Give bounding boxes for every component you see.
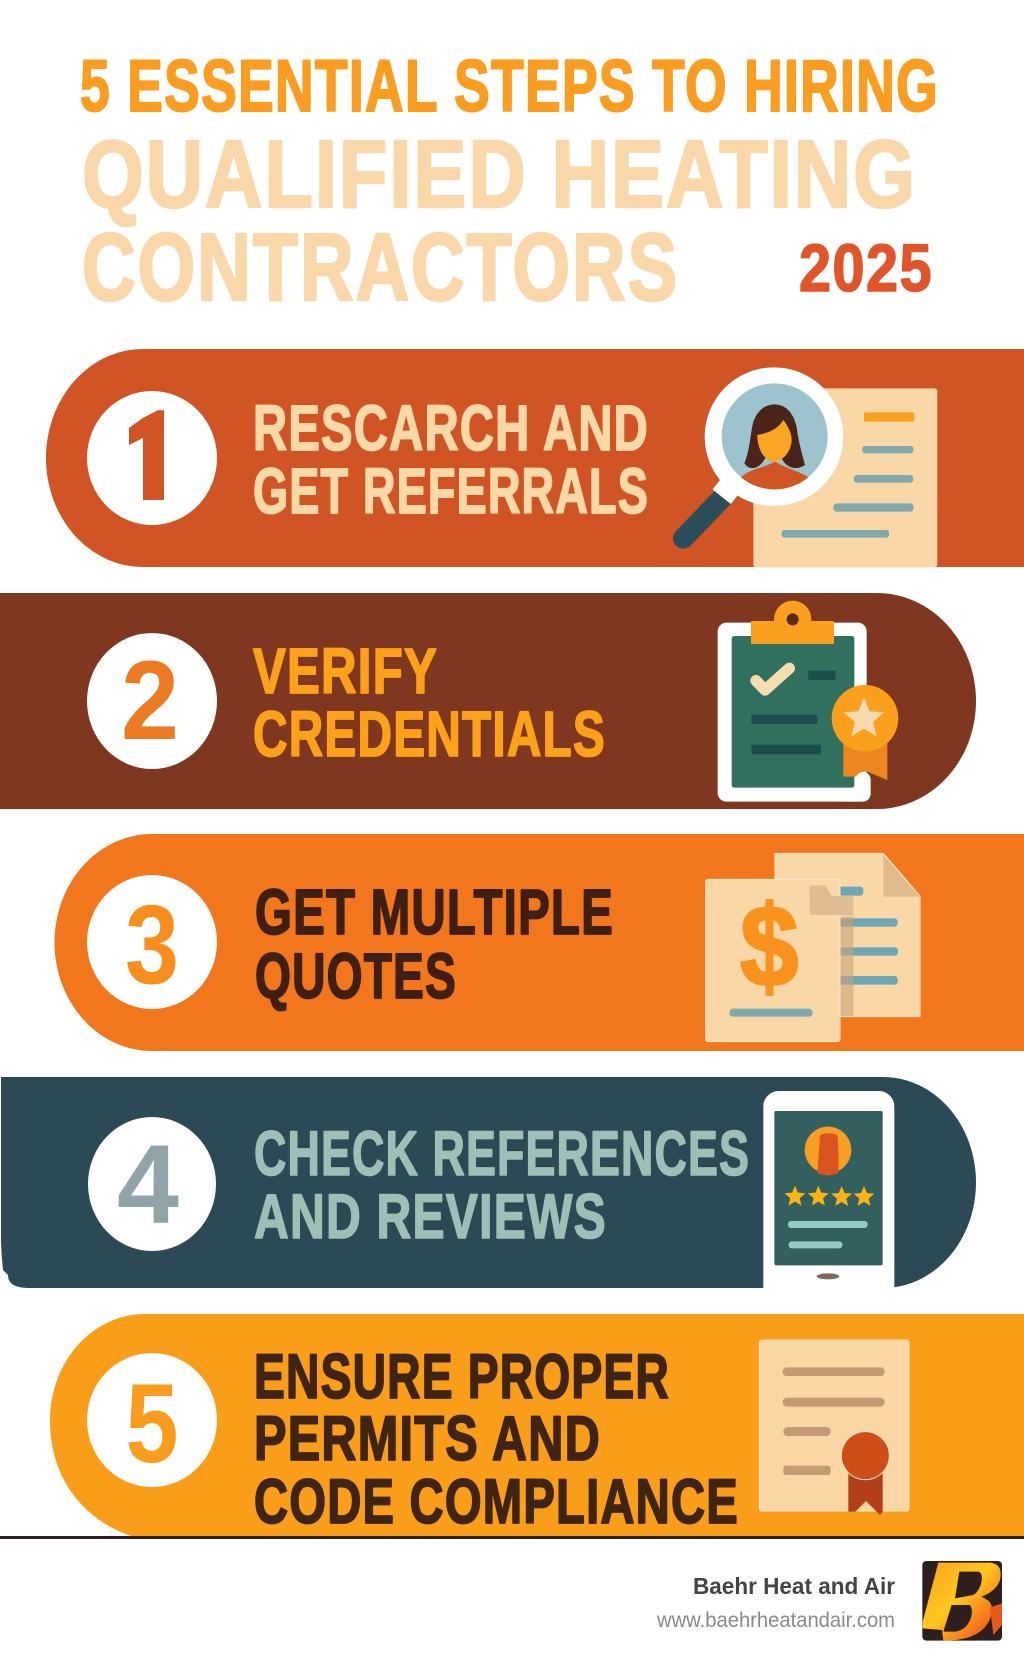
panel: step 2 credentials	[0, 593, 976, 809]
step 3 number badge	[87, 875, 217, 1009]
step 4 number badge: 4	[117, 1122, 179, 1247]
step 2 number badge	[87, 633, 217, 769]
step 5 heading: ENSURE PROPER	[254, 1342, 670, 1412]
step 1 heading: RESCARCH AND	[253, 392, 649, 464]
year: 2025	[799, 231, 933, 306]
step 2 heading: VERIFY	[253, 635, 438, 707]
title line: contractors: CONTRACTORS	[82, 214, 679, 321]
panel: step 5 permits	[50, 1314, 1024, 1537]
step 1 number badge	[87, 388, 217, 526]
website: www.baehrheatandair.com	[656, 1609, 895, 1632]
footer	[656, 1561, 1002, 1641]
step 4 heading: CHECK REFERENCES	[254, 1119, 750, 1189]
step 5 number badge: 5	[126, 1361, 178, 1486]
icon: quote documents with dollar sign: $	[740, 883, 798, 1011]
step 2 heading	[253, 635, 606, 770]
step 5 heading	[254, 1342, 739, 1537]
logo	[922, 1561, 1002, 1641]
step 3 number badge: 3	[125, 882, 179, 1007]
title	[80, 46, 939, 321]
step 3 heading: GET MULTIPLE	[255, 876, 614, 948]
panel: step 3 quotes	[55, 834, 1024, 1051]
icon: clipboard with award badge	[718, 601, 898, 802]
step 5 heading: CODE COMPLIANCE	[254, 1467, 739, 1537]
step 5 number badge	[87, 1353, 217, 1487]
step 1 number badge: 1	[120, 388, 189, 526]
step 4 number badge	[88, 1117, 216, 1251]
step 1 heading: GET REFERRALS	[253, 455, 649, 527]
step 5 heading: PERMITS AND	[254, 1404, 601, 1474]
step 3 heading: QUOTES	[255, 940, 457, 1012]
icon: phone with star reviews	[763, 1091, 894, 1292]
icon: magnifier over resume	[683, 367, 937, 567]
icon: quote documents with dollar sign	[706, 853, 920, 1042]
step 2 heading: CREDENTIALS	[253, 698, 606, 770]
step 2 number badge: 2	[121, 638, 179, 763]
step 1 heading	[253, 392, 649, 527]
step 4 heading	[254, 1119, 750, 1252]
icon: certificate with seal	[759, 1340, 909, 1515]
footer divider	[0, 1536, 1024, 1539]
step 4 heading: AND REVIEWS	[254, 1182, 607, 1252]
step 3 heading	[255, 876, 614, 1012]
company name: Baehr Heat and Air	[693, 1573, 895, 1599]
panel: step 1 research	[46, 349, 1024, 567]
panel: step 4 references	[1, 1077, 976, 1292]
